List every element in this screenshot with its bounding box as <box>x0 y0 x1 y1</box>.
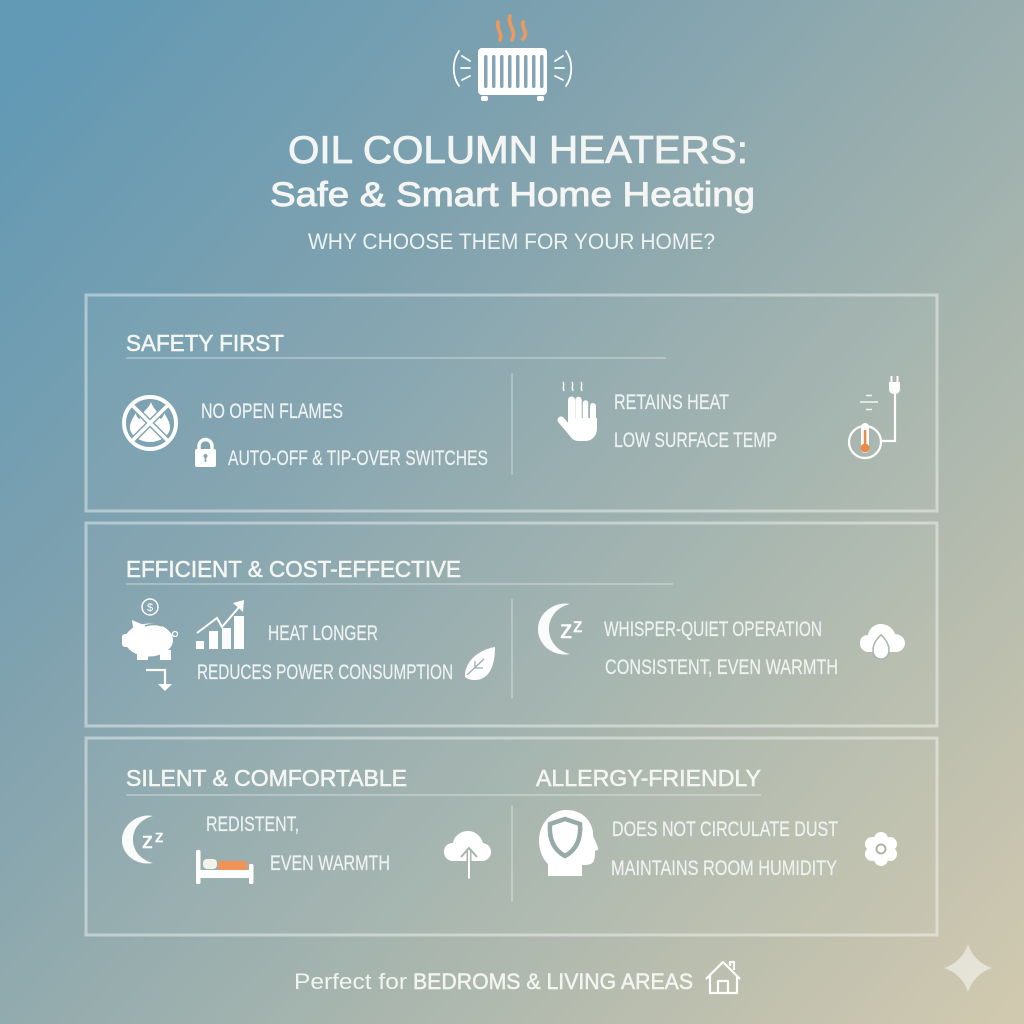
heading: silent and comfortable: SILENT & COMFORTABLE <box>126 765 407 791</box>
icon: piggy bank and coin <box>122 599 178 691</box>
text: heat longer: HEAT LONGER <box>268 622 378 645</box>
icon: moon with zz: z <box>142 828 153 853</box>
icon: house <box>706 962 740 993</box>
text: consistent, even warmth: CONSISTENT, EVEN WARMTH <box>605 656 838 679</box>
footer line: BEDROMS & LIVING AREAS <box>413 969 693 994</box>
icon: no flame <box>124 397 176 449</box>
icon: rising bar chart <box>196 600 244 649</box>
panel: safety first <box>86 295 937 511</box>
panel: silent and allergy-friendly <box>86 738 937 935</box>
icon: leaf <box>465 647 495 680</box>
icon: cloud with drop <box>860 624 905 659</box>
footer line <box>294 969 693 994</box>
text: reduces power consumption: REDUCES POWER CONSUMPTION <box>197 661 453 684</box>
icon: down arrow <box>146 670 172 691</box>
text: redistent: REDISTENT, <box>206 813 299 836</box>
icon: hand with heat <box>561 382 597 441</box>
panel: efficient and cost-effective <box>86 523 937 726</box>
icon: piggy bank and coin: $ <box>147 602 153 614</box>
icon: moon with zz: z <box>560 616 572 644</box>
heading: efficient: EFFICIENT & COST-EFFECTIVE <box>126 556 461 582</box>
text: even warmth: EVEN WARMTH <box>270 852 390 875</box>
title: OIL COLUMN HEATERS: <box>288 129 748 172</box>
tagline: WHY CHOOSE THEM FOR YOUR HOME? <box>308 229 715 254</box>
footer line: Perfect for <box>294 969 407 994</box>
icon: thermometer and plug <box>849 376 900 458</box>
icon: flower <box>865 832 897 866</box>
text: low surface temp: LOW SURFACE TEMP <box>614 429 777 452</box>
icon: moon with zz <box>122 816 164 864</box>
text: does not circulate dust: DOES NOT CIRCULATE DUST <box>612 818 838 841</box>
icon: moon with zz: z <box>573 616 582 637</box>
icon: head with shield <box>539 810 598 876</box>
heading: allergy-friendly: ALLERGY-FRIENDLY <box>536 765 761 791</box>
icon: moon with zz <box>538 604 582 654</box>
text: auto-off: AUTO-OFF & TIP-OVER SWITCHES <box>228 447 488 470</box>
icon: moon with zz: z <box>155 827 164 846</box>
icon: lock <box>195 440 216 467</box>
heading: safety first: SAFETY FIRST <box>126 330 284 356</box>
icon: cloud with up arrow <box>444 831 491 878</box>
icon: bed <box>196 850 254 884</box>
text: maintains room humidity: MAINTAINS ROOM HUMIDITY <box>611 857 837 880</box>
icon: radiator heater <box>454 16 571 101</box>
icon: sparkle <box>944 944 992 992</box>
text: no open flames: NO OPEN FLAMES <box>201 400 343 423</box>
text: retains heat: RETAINS HEAT <box>614 391 729 414</box>
subtitle: Safe & Smart Home Heating <box>270 176 755 214</box>
text: whisper-quiet operation: WHISPER-QUIET OPERATION <box>604 618 822 641</box>
